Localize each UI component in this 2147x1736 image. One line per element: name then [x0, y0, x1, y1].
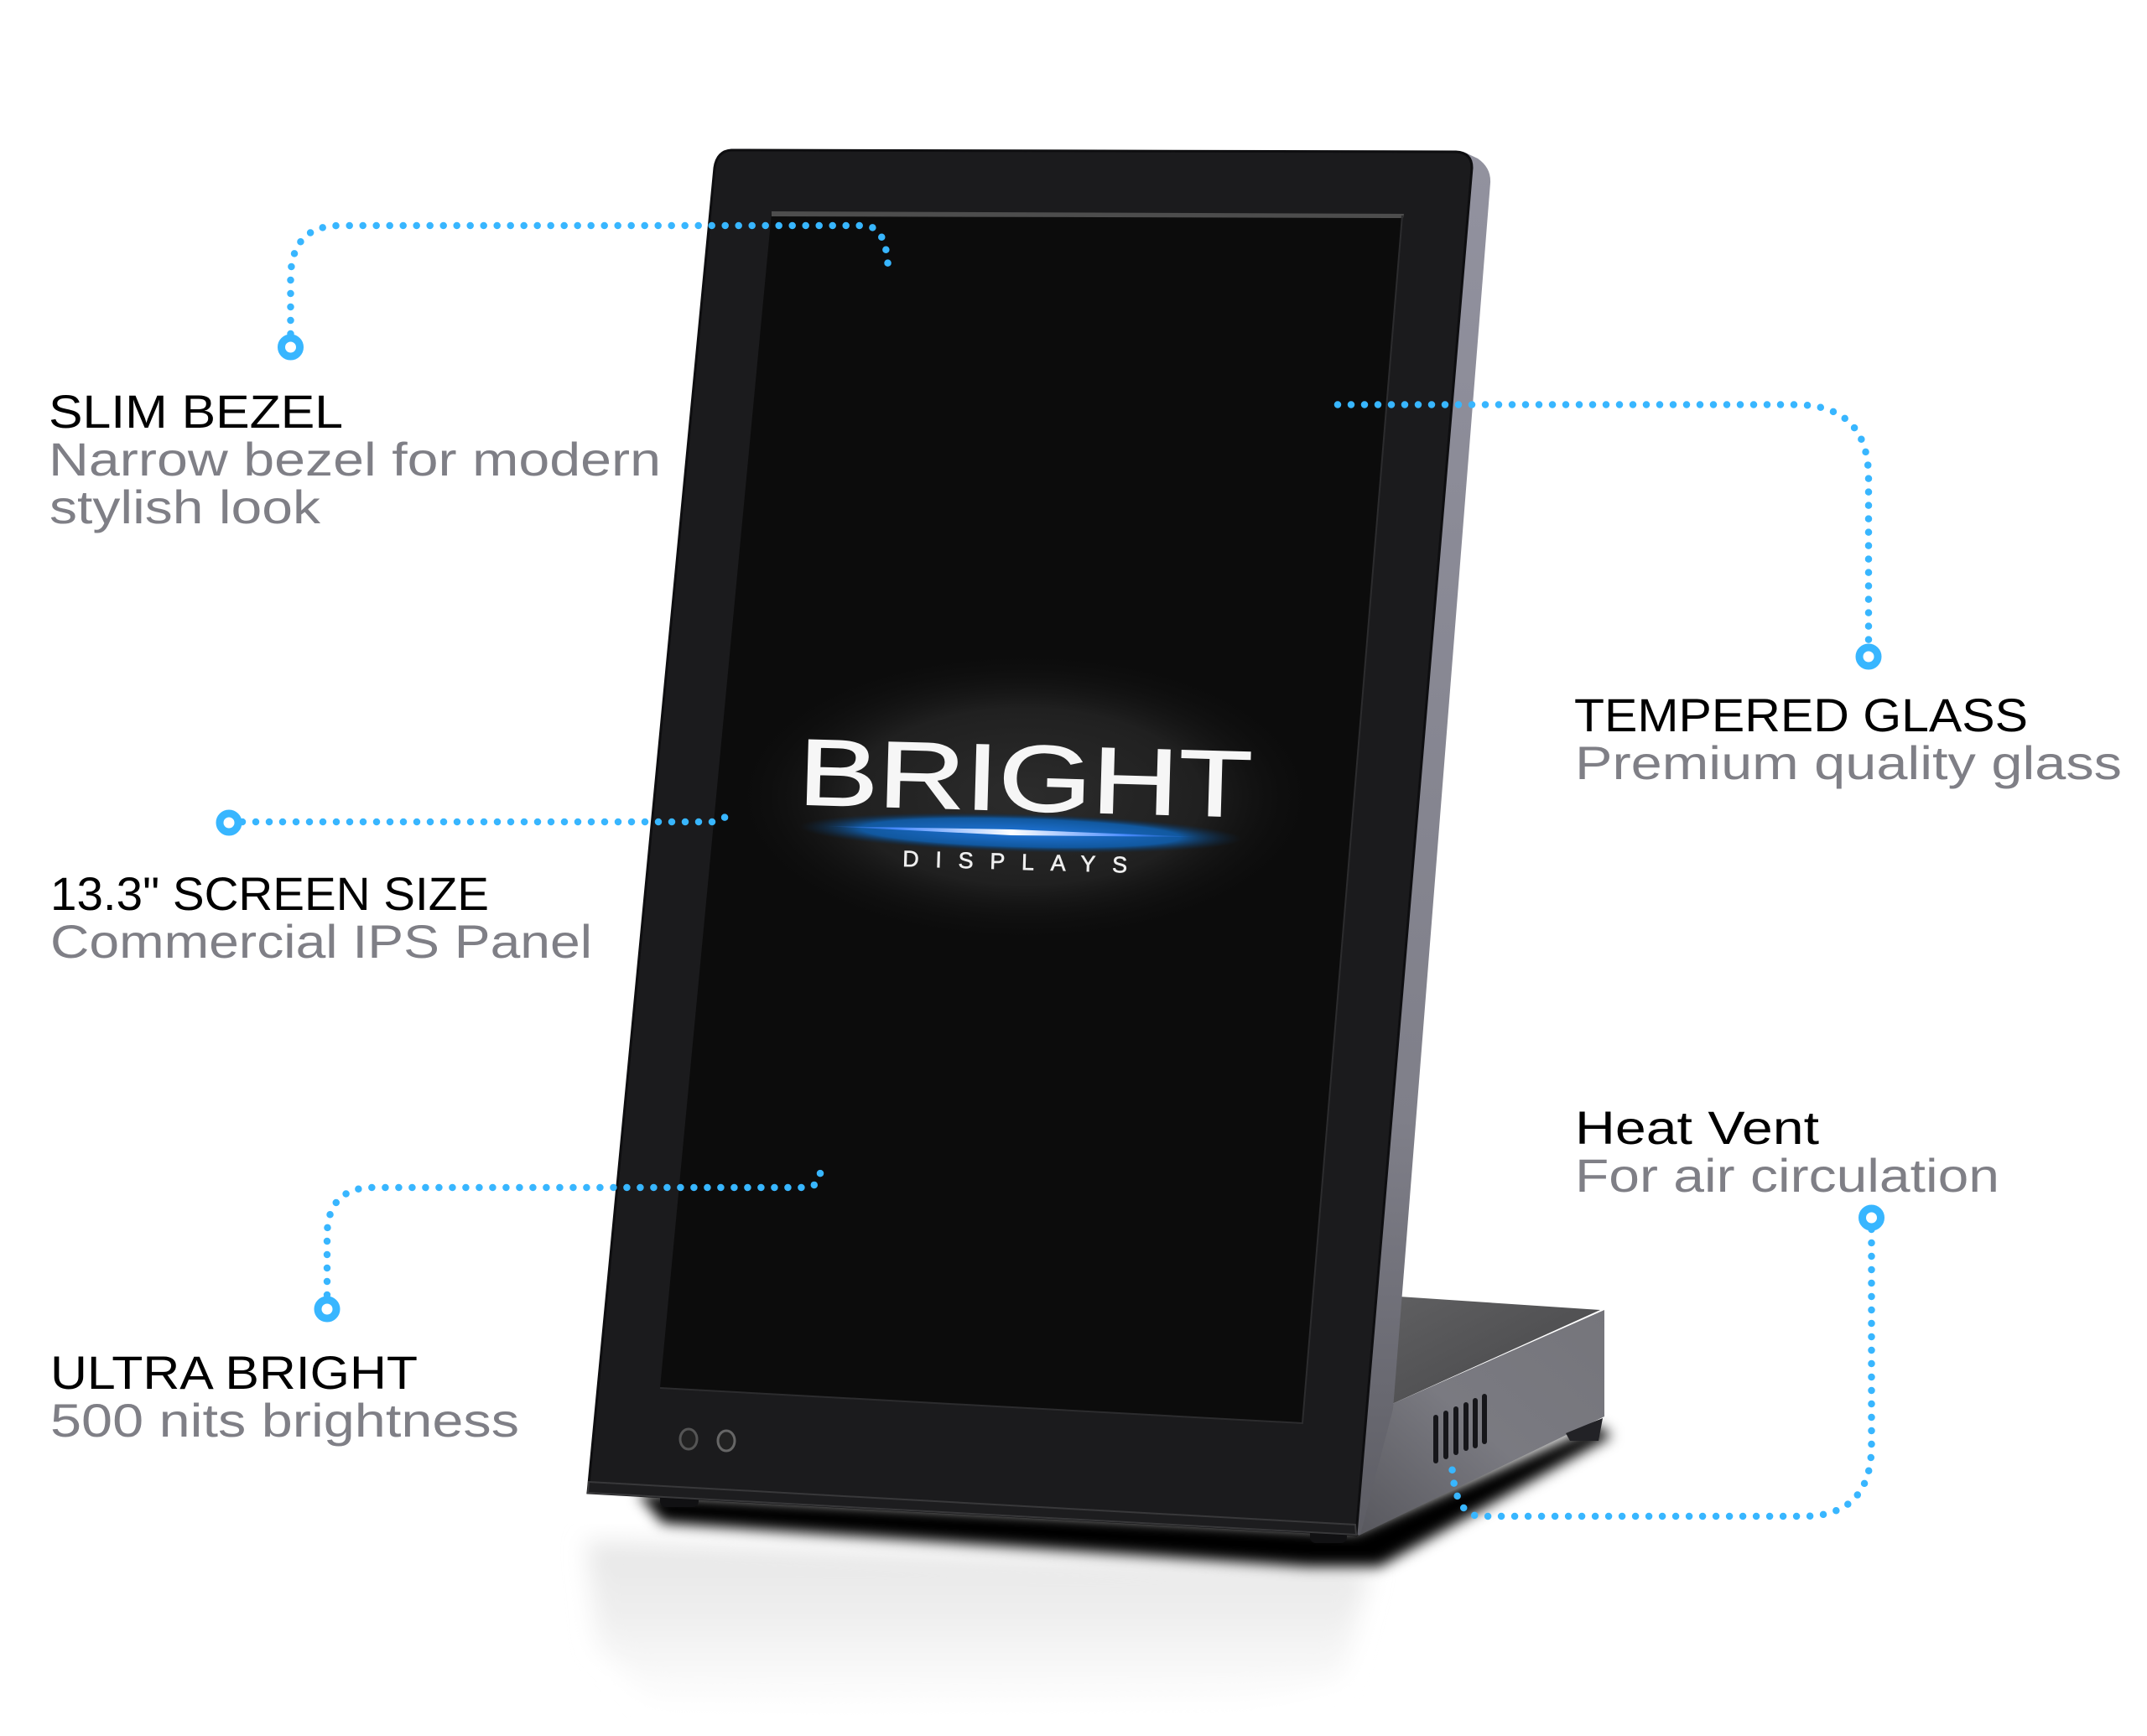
marker ring — [1859, 647, 1878, 666]
front panel bezel — [588, 150, 1472, 1535]
logo blue swoosh — [798, 808, 1243, 858]
logo subtitle: DISPLAYS — [902, 846, 1128, 877]
base top surface — [1392, 1297, 1600, 1404]
connector line — [1338, 404, 1869, 642]
heading: Heat Vent — [1575, 1101, 1820, 1154]
description second line: stylish look — [49, 481, 321, 533]
logo glow — [731, 650, 1318, 943]
heat vent slits — [1433, 1394, 1487, 1463]
side edge strip — [1350, 152, 1490, 1535]
logo light beam — [824, 826, 1199, 837]
connector line — [1452, 1229, 1872, 1516]
connector line — [242, 817, 726, 822]
description: Premium quality glass — [1575, 736, 2122, 789]
marker ring — [220, 813, 238, 832]
connector line — [327, 1166, 821, 1295]
floor reflection — [587, 1541, 1370, 1711]
description: 500 nits brightness — [50, 1394, 519, 1447]
bottom lip of panel — [588, 1482, 1356, 1535]
camera lens right — [718, 1431, 735, 1451]
logo — [731, 650, 1318, 943]
callout: screen size — [50, 813, 726, 968]
screen bottom edge — [660, 216, 1402, 1423]
heading: SLIM BEZEL — [49, 385, 343, 438]
callout: ultra bright — [50, 1166, 821, 1447]
heading: ULTRA BRIGHT — [50, 1346, 418, 1399]
display product illustration — [587, 150, 1612, 1711]
callout: slim bezel — [49, 226, 888, 533]
front feet — [660, 1489, 1347, 1543]
screen glass — [660, 213, 1402, 1423]
base side face — [1342, 1310, 1604, 1536]
marker ring — [282, 338, 300, 356]
logo wordmark: BRIGHT — [797, 720, 1254, 837]
description: Narrow bezel for modern — [49, 433, 661, 486]
connector line — [290, 226, 888, 334]
callout: tempered glass — [1338, 404, 2122, 789]
description: Commercial IPS Panel — [50, 915, 592, 968]
rear foot — [1566, 1418, 1603, 1441]
callout: heat vent — [1452, 1101, 1999, 1516]
floor shadow — [637, 1426, 1612, 1567]
marker ring — [1862, 1208, 1880, 1227]
description: For air circulation — [1575, 1149, 1999, 1202]
heading: TEMPERED GLASS — [1574, 689, 2028, 741]
heading: 13.3" SCREEN SIZE — [50, 867, 489, 920]
marker ring — [318, 1300, 336, 1318]
camera lens left — [680, 1429, 697, 1449]
screen top highlight — [772, 211, 1404, 218]
